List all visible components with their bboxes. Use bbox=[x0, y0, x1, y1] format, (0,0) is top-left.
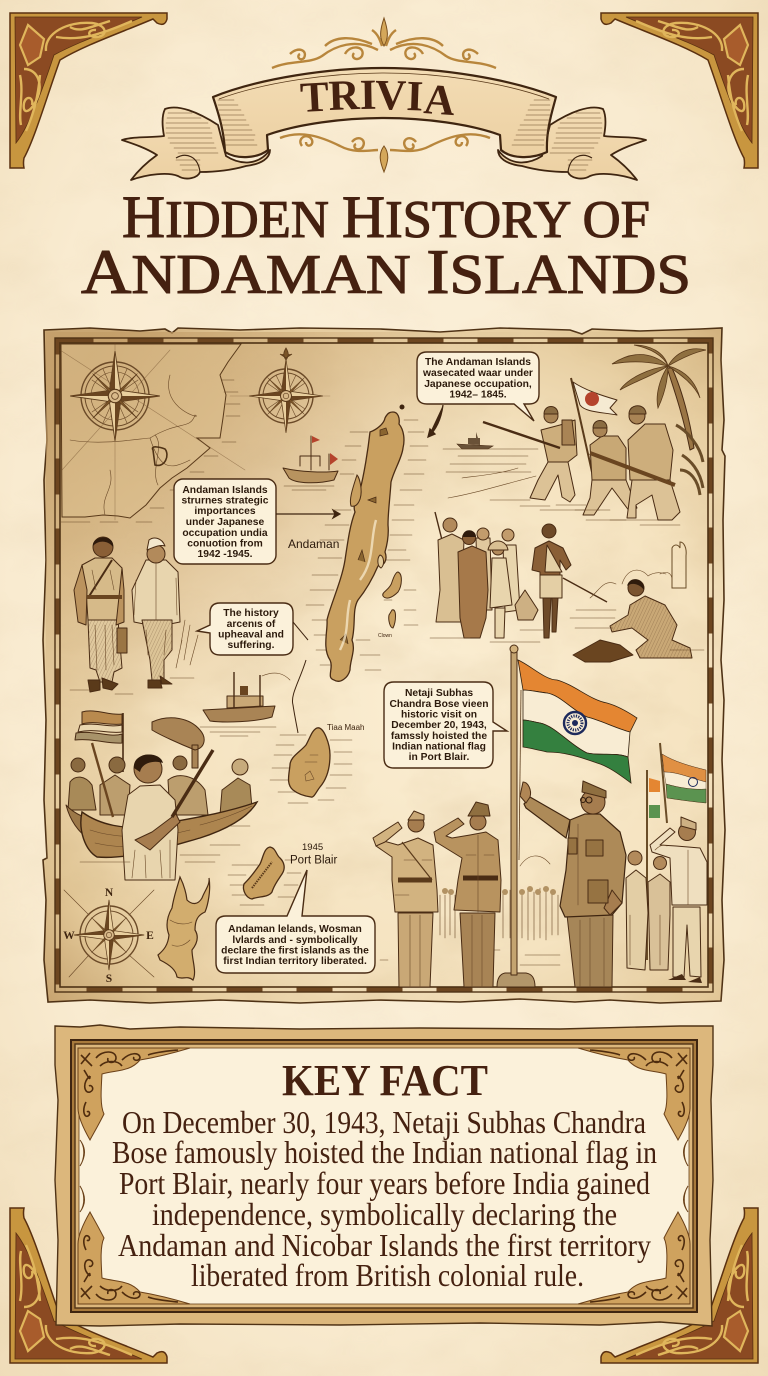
sea hatching around Andaman bbox=[306, 420, 428, 670]
map label: small island: Clown bbox=[378, 633, 392, 639]
banner label: TRIVIA: A bbox=[422, 76, 457, 125]
icon: sailing boat bbox=[283, 436, 338, 490]
callout: strategic importance: strurnes strategic bbox=[182, 496, 269, 506]
illustration: saluting soldier left bbox=[373, 811, 438, 987]
indian flag main bbox=[518, 660, 637, 783]
key fact body: Andaman and Nicobar Islands the first territory bbox=[118, 1227, 651, 1263]
corner ornament: bottom right bbox=[601, 1208, 758, 1363]
banner label: TRIVIA: V bbox=[375, 72, 407, 120]
illustration: warship and shoreline bbox=[443, 432, 670, 520]
callout: Netaji visit: famssly hoisted the bbox=[391, 731, 487, 742]
key fact body: liberated from British colonial rule. bbox=[191, 1257, 584, 1293]
map label: 1945 Port Blair bbox=[290, 842, 337, 866]
map label: 1945 Port Blair: 1945 bbox=[302, 842, 323, 853]
illustration: soldiers bbox=[483, 406, 680, 525]
illustration: palm tree bbox=[612, 345, 706, 495]
callout: first territory: lvlards and - symbolically bbox=[232, 935, 358, 946]
callout: first territory: first Indian territory liberated. bbox=[223, 956, 367, 967]
front man bbox=[122, 785, 178, 880]
icon: compass rose with cardinal letters: N bbox=[105, 887, 114, 899]
illustration: boat with freedom fighters bbox=[66, 711, 257, 880]
banner label: TRIVIA: R bbox=[328, 72, 361, 120]
callout: history of upheaval: The history bbox=[223, 608, 279, 619]
ornament: key fact corners bbox=[78, 1048, 690, 1304]
callout: Netaji visit: Netaji Subhas bbox=[405, 688, 473, 699]
icon: ashoka chakra bbox=[564, 712, 586, 734]
callout: Netaji visit bbox=[384, 682, 507, 768]
panel: key fact bbox=[55, 1025, 713, 1326]
callout: first territory bbox=[216, 870, 375, 973]
map: Andaman main island bbox=[326, 404, 404, 681]
flourish below banner bbox=[280, 134, 490, 172]
corner ornament: top left bbox=[10, 13, 167, 168]
soldier one bbox=[483, 406, 577, 502]
island tree bbox=[152, 718, 204, 768]
icon: compass rose small bbox=[249, 348, 323, 433]
callout: history of upheaval bbox=[197, 603, 293, 655]
curved arrow to island bbox=[428, 405, 443, 437]
callout: history of upheaval: upheaval and bbox=[218, 630, 284, 640]
key fact body: independence, symbolically declaring the bbox=[152, 1196, 617, 1232]
corner ornament: bottom left bbox=[10, 1208, 167, 1363]
callout: Japanese occupation: Japanese occupation, bbox=[424, 379, 532, 390]
illustration: two men left bbox=[70, 537, 198, 694]
man with satchel bbox=[74, 537, 127, 692]
callout: first territory: Andaman lelands, Wosman bbox=[228, 924, 362, 935]
key fact body: Port Blair, nearly four years before India gained bbox=[119, 1165, 650, 1201]
panel: illustrated map bbox=[43, 328, 725, 1003]
illustration: Japanese flag bbox=[571, 378, 617, 472]
callout: Japanese occupation bbox=[417, 352, 539, 421]
soldier two bbox=[583, 420, 637, 515]
callout: strategic importance: Andaman Islands bbox=[182, 485, 268, 496]
callout: Netaji visit: December 20, 1943, bbox=[391, 720, 487, 731]
banner: left ribbon tail bbox=[122, 107, 270, 180]
callout: Japanese occupation: The Andaman Islands bbox=[425, 357, 531, 368]
banner: right ribbon tail bbox=[498, 107, 646, 180]
illustration: Netaji Subhas Chandra Bose bbox=[520, 781, 626, 987]
icon: compass rose with cardinal letters: E bbox=[146, 930, 154, 942]
crew bbox=[68, 777, 96, 810]
callout: Netaji visit: in Port Blair. bbox=[409, 752, 469, 763]
map: small eastern islands bbox=[378, 555, 401, 628]
key fact outer frame bbox=[55, 1025, 713, 1326]
flag on boat bbox=[75, 711, 123, 772]
map: Port Blair island bbox=[228, 847, 301, 905]
soldier three bbox=[627, 406, 680, 520]
callout: history of upheaval: arcenıs of bbox=[227, 619, 276, 630]
callout: strategic importance: under Japanese bbox=[186, 517, 264, 528]
boat hull bbox=[66, 805, 100, 840]
illustration: distant crowd bbox=[380, 856, 560, 975]
callout: history of upheaval: suffering. bbox=[228, 640, 275, 651]
title: ANDAMAN ISLANDS bbox=[81, 237, 691, 307]
key fact body: On December 30, 1943, Netaji Subhas Chandra bbox=[122, 1104, 646, 1140]
callout: Netaji visit: Chandra Bose vieen bbox=[390, 699, 488, 710]
route line between islands bbox=[292, 622, 308, 733]
icon: compass rose with cardinal letters bbox=[63, 887, 154, 985]
map label: Andaman: Andaman bbox=[288, 537, 339, 551]
map: lower island bbox=[158, 877, 210, 980]
banner: main scroll bbox=[213, 68, 556, 157]
illustration: attendants and saluting man bbox=[626, 817, 707, 983]
banner label: TRIVIA: T bbox=[299, 74, 330, 122]
map label: 1945 Port Blair: Port Blair bbox=[290, 854, 337, 866]
key fact body bbox=[112, 1104, 657, 1293]
callout: strategic importance: importances bbox=[194, 506, 256, 517]
icon: compass rose with cardinal letters: S bbox=[106, 973, 112, 985]
title: HIDDEN HISTORY OF bbox=[122, 184, 650, 250]
small flags behind bbox=[647, 743, 706, 960]
callout: strategic importance bbox=[174, 479, 276, 564]
map parchment bbox=[43, 328, 725, 1003]
arrow to island bbox=[276, 510, 340, 518]
map frame bbox=[55, 338, 713, 992]
callout: first territory: declare the first islands as the bbox=[221, 946, 369, 956]
callout: Netaji visit: historic visit on bbox=[401, 710, 477, 720]
corner ornament: top right bbox=[601, 13, 758, 168]
callout: Netaji visit: Indian national flag bbox=[392, 742, 486, 752]
illustration: saluting officer bbox=[434, 802, 501, 987]
banner label: TRIVIA: I bbox=[359, 72, 377, 119]
callout: strategic importance: 1942 -1945. bbox=[198, 549, 253, 560]
man with cap bbox=[132, 538, 180, 688]
flourish above banner bbox=[272, 18, 496, 68]
illustration: steamer bbox=[200, 672, 290, 736]
map: Tiaa Maah island bbox=[270, 723, 364, 803]
callout: Japanese occupation: 1942– 1845. bbox=[449, 390, 507, 400]
illustration: villagers bbox=[430, 512, 571, 642]
callout: strategic importance: conuotion from bbox=[187, 538, 263, 550]
callout: Japanese occupation: wasecated waar under bbox=[422, 368, 533, 379]
icon: compass rose large bbox=[70, 351, 160, 441]
map label: Tiaa Maah: Tiaa Maah bbox=[327, 723, 364, 732]
key fact heading: KEY FACT bbox=[282, 1056, 488, 1105]
long rifle bbox=[590, 453, 675, 485]
callout: strategic importance: occupation undia bbox=[182, 528, 268, 539]
banner label: TRIVIA: I bbox=[406, 73, 424, 121]
flagpole bbox=[497, 645, 535, 987]
key fact body: Bose famously hoisted the Indian national flag in bbox=[112, 1134, 657, 1170]
icon: compass rose with cardinal letters: W bbox=[63, 930, 75, 942]
title bbox=[81, 184, 691, 307]
key fact inner panel bbox=[71, 1040, 697, 1312]
illustration: kneeling woman and fire bbox=[563, 542, 704, 662]
map: india coast bbox=[60, 343, 330, 522]
